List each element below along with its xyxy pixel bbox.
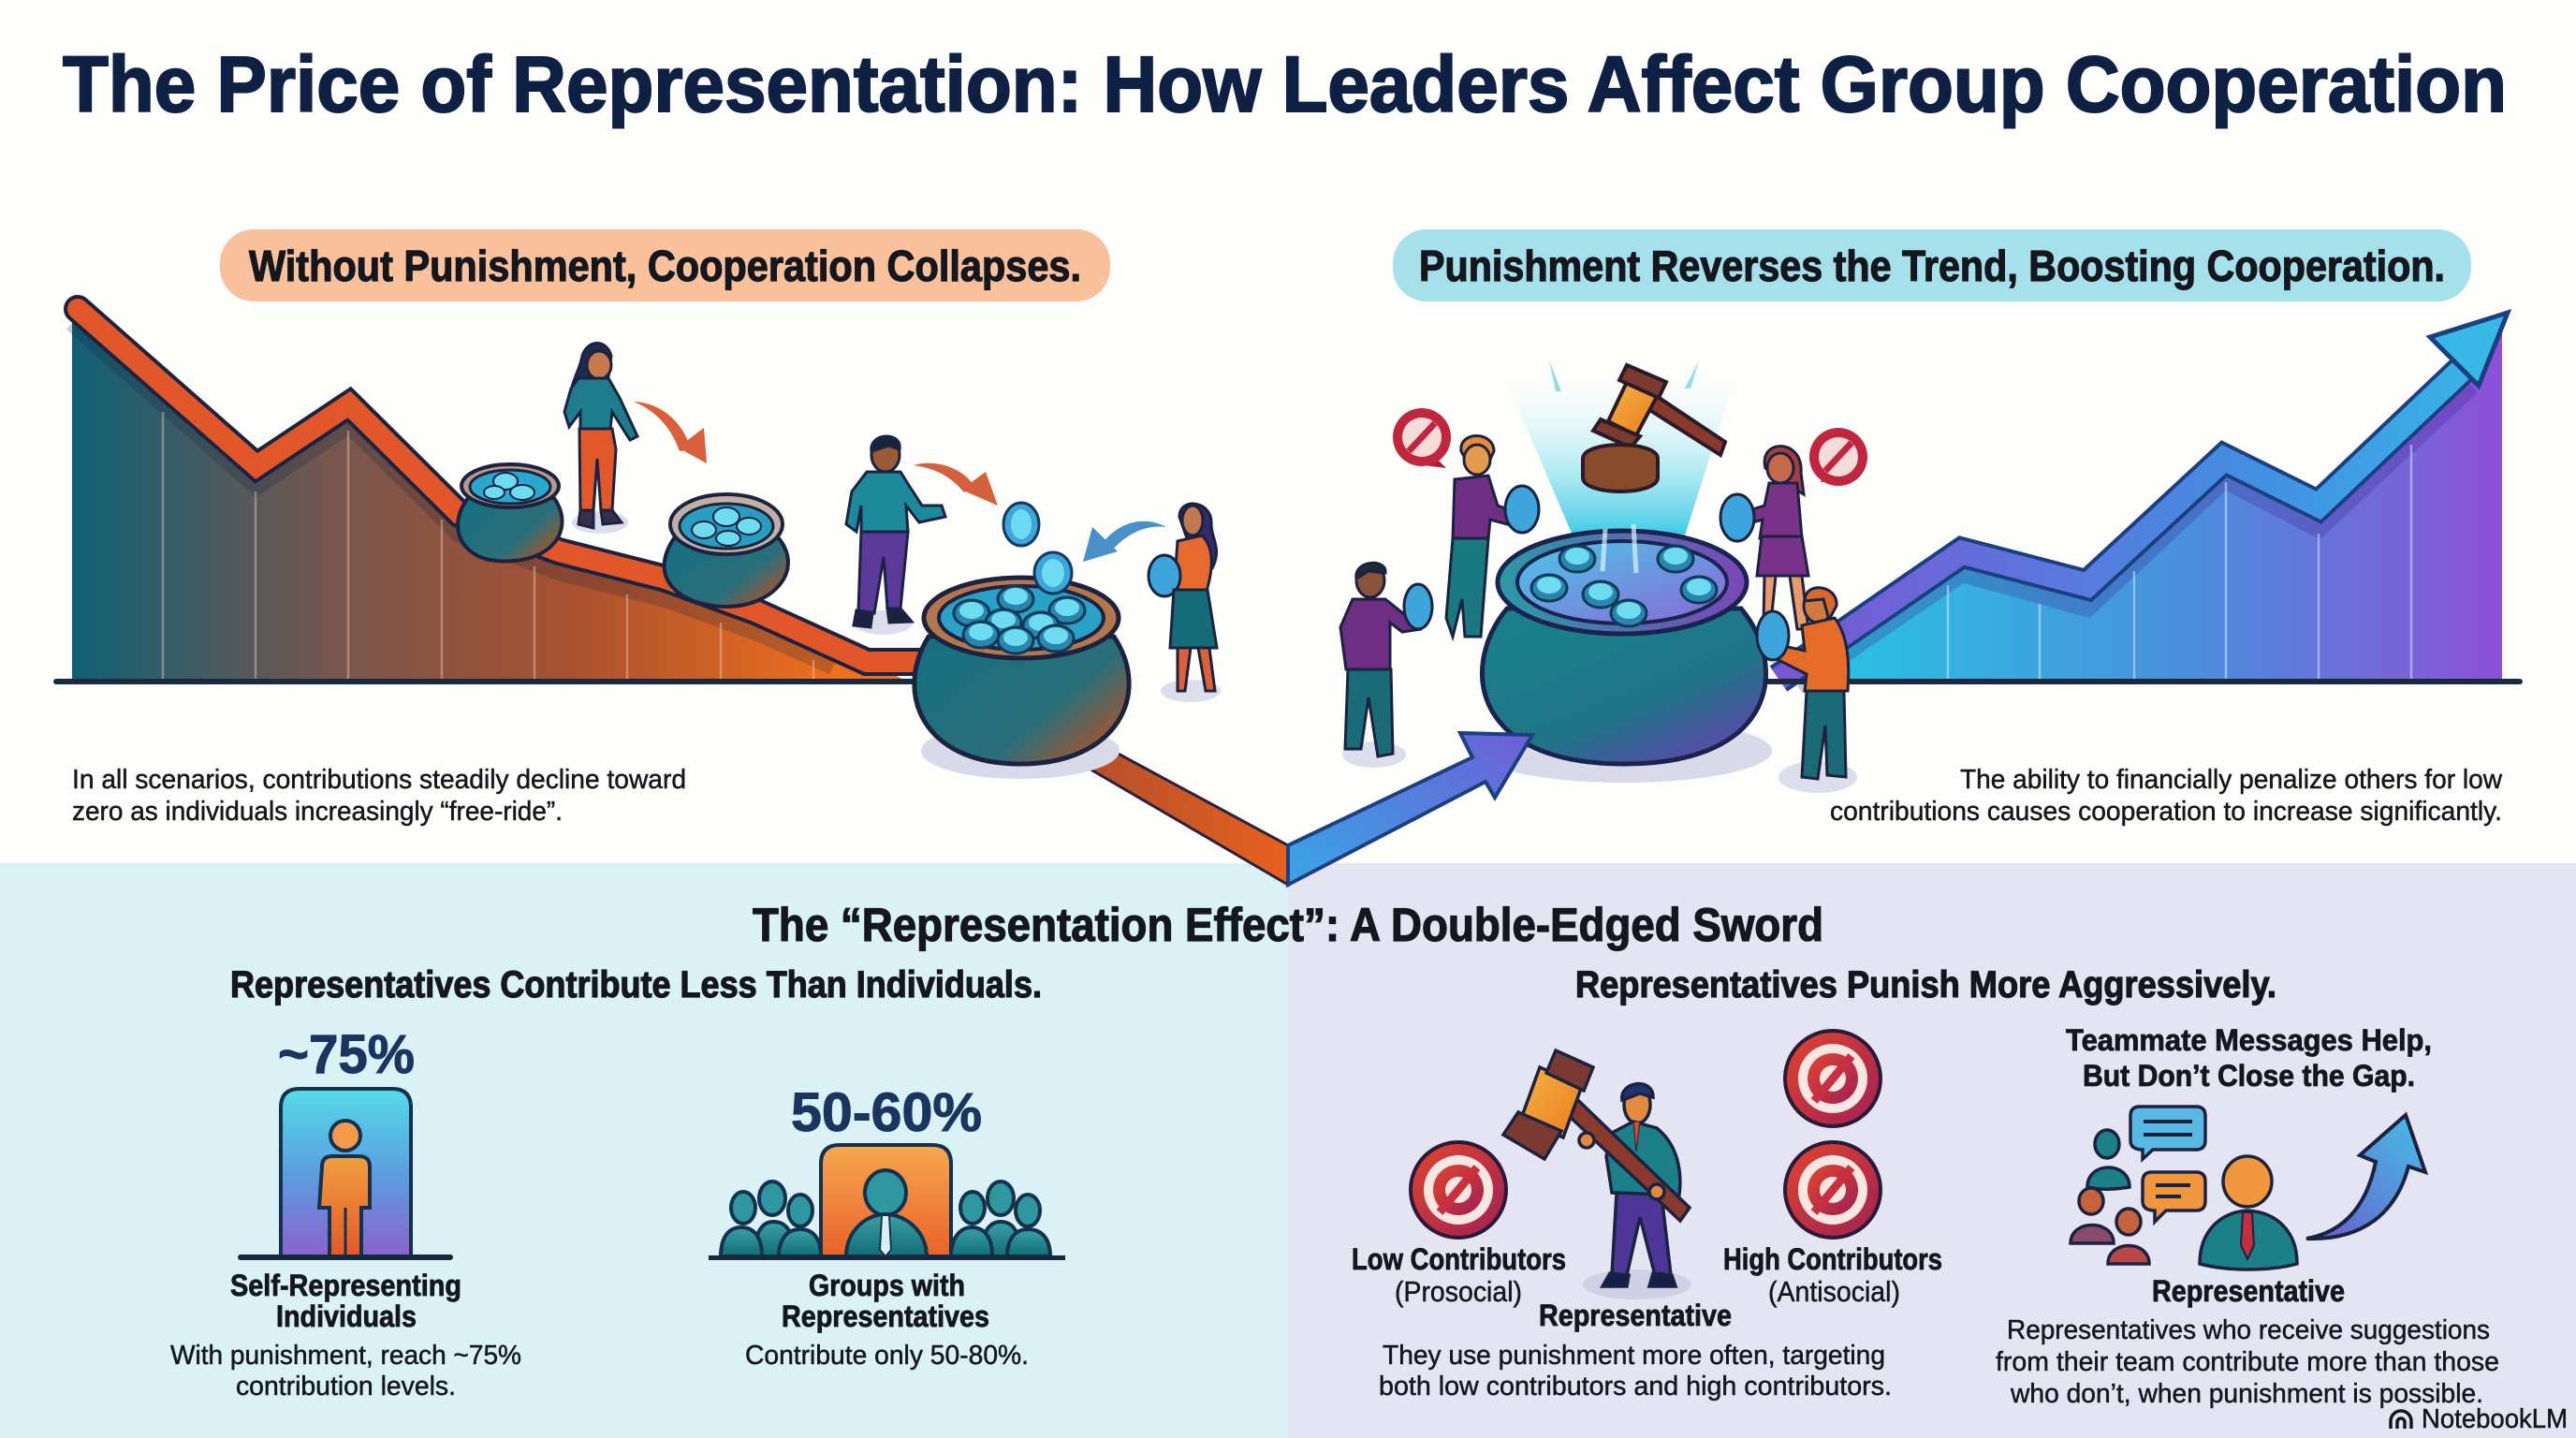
declining area chart — [53, 309, 927, 684]
large pot with coins — [915, 578, 1129, 779]
rising area chart — [1741, 313, 2523, 685]
icon: group with representative — [709, 1145, 1065, 1260]
label: self-representing individuals: Individuals — [276, 1299, 417, 1333]
label: self-representing individuals: Self-Representing — [230, 1269, 461, 1302]
text: suggestions note — [1996, 1315, 2499, 1409]
text: decline note: zero as individuals increasingly “free-ride”. — [72, 797, 563, 827]
stat: 50-60%: 50-60% — [791, 1082, 982, 1143]
person: back left holding coin — [1446, 436, 1539, 637]
stat: ~75%: ~75% — [278, 1024, 415, 1085]
arrow: blue curve — [1083, 521, 1166, 562]
small pot 1 — [458, 464, 562, 561]
label: high contributors: (Antisocial) — [1768, 1275, 1900, 1308]
label: self-representing individuals — [230, 1269, 461, 1333]
person: woman in teal — [564, 343, 637, 534]
person: man in teal and purple — [846, 436, 945, 635]
text: punish more often: both low contributors and high contributors. — [1379, 1372, 1892, 1401]
badge: penalty right — [1809, 428, 1867, 486]
section heading: The “Representation Effect”: A Double-Edged Sword — [753, 899, 1823, 951]
subheading right: Representatives Punish More Aggressively. — [1575, 964, 2276, 1005]
gavel — [1583, 365, 1725, 492]
text: punishment contribution: With punishment, reach ~75% — [170, 1341, 521, 1371]
arrow: orange curve 2 — [914, 463, 998, 506]
badge: penalty left — [1393, 408, 1451, 468]
label: high contributors — [1723, 1242, 1942, 1308]
text: contribute only: Contribute only 50-80%. — [745, 1341, 1029, 1371]
pill heading: punishment reverses — [1393, 229, 2471, 301]
arrow: upward curve — [2306, 1115, 2425, 1239]
text: suggestions note: Representatives who receive suggestions — [2007, 1315, 2490, 1345]
subheading left: Representatives Contribute Less Than Individuals. — [230, 964, 1042, 1005]
title: The Price of Representation: How Leaders Affect Group Cooperation — [63, 40, 2507, 128]
heading: teammate messages: But Don’t Close the Gap. — [2083, 1059, 2415, 1093]
text: increase note: The ability to financially penalize others for low — [1960, 765, 2503, 795]
label: groups with representatives: Groups with — [809, 1269, 965, 1302]
person: woman in orange — [1149, 504, 1221, 702]
background: left panel — [0, 863, 1288, 1438]
text: increase note — [1830, 765, 2503, 827]
text: punishment contribution — [170, 1341, 521, 1401]
big pot with coins — [1476, 524, 1772, 783]
heading: teammate messages — [2066, 1023, 2432, 1093]
text: suggestions note: who don’t, when punishment is possible. — [2010, 1379, 2483, 1409]
text: decline note — [72, 765, 686, 827]
arrow: orange curve 1 — [634, 402, 707, 463]
label: high contributors: High Contributors — [1723, 1242, 1942, 1276]
declining arrow into V — [1076, 744, 1288, 885]
pill heading: without punishment — [220, 229, 1110, 301]
label: groups with representatives — [782, 1269, 989, 1333]
icon: team messages and representative — [2071, 1107, 2297, 1269]
icon: self-representing person — [238, 1089, 453, 1260]
background: top area — [0, 0, 2576, 865]
heading: teammate messages: Teammate Messages Help, — [2066, 1023, 2432, 1057]
falling coin 1 — [1003, 503, 1039, 546]
person: left with purple shirt — [1340, 563, 1432, 768]
icon: high contributor target top — [1785, 1031, 1881, 1126]
icon: representative with gavel — [1503, 1050, 1691, 1299]
text: increase note: contributions causes cooperation to increase significantly. — [1830, 797, 2502, 827]
person: back right woman — [1720, 447, 1808, 629]
person: front right in orange shirt — [1757, 588, 1857, 793]
pill heading: punishment reverses: Punishment Reverses the Trend, Boosting Cooperation. — [1419, 242, 2445, 290]
icon: high contributor target lower — [1785, 1142, 1881, 1238]
background: right panel — [1288, 863, 2576, 1438]
pill heading: without punishment: Without Punishment, Cooperation Collapses. — [249, 242, 1081, 290]
rising arrow into pot — [1288, 733, 1532, 885]
label: representative center: Representative — [1539, 1299, 1732, 1332]
icon: low contributor target — [1411, 1142, 1506, 1238]
text: punishment contribution: contribution levels. — [236, 1372, 456, 1401]
small pot 2 — [665, 494, 788, 607]
falling coin 2 — [1034, 552, 1072, 594]
text: punish more often — [1379, 1341, 1892, 1401]
label: groups with representatives: Representatives — [782, 1299, 989, 1333]
label: low contributors — [1352, 1242, 1566, 1308]
label: low contributors: (Prosocial) — [1395, 1275, 1522, 1308]
text: decline note: In all scenarios, contributions steadily decline toward — [72, 765, 686, 795]
spotlight beam — [1510, 360, 1732, 536]
label: representative right: Representative — [2152, 1274, 2345, 1308]
text: suggestions note: from their team contribute more than those — [1996, 1347, 2499, 1377]
text: punish more often: They use punishment more often, targeting — [1383, 1341, 1885, 1371]
label: low contributors: Low Contributors — [1352, 1242, 1566, 1276]
NotebookLM watermark: NotebookLM — [2422, 1404, 2568, 1434]
